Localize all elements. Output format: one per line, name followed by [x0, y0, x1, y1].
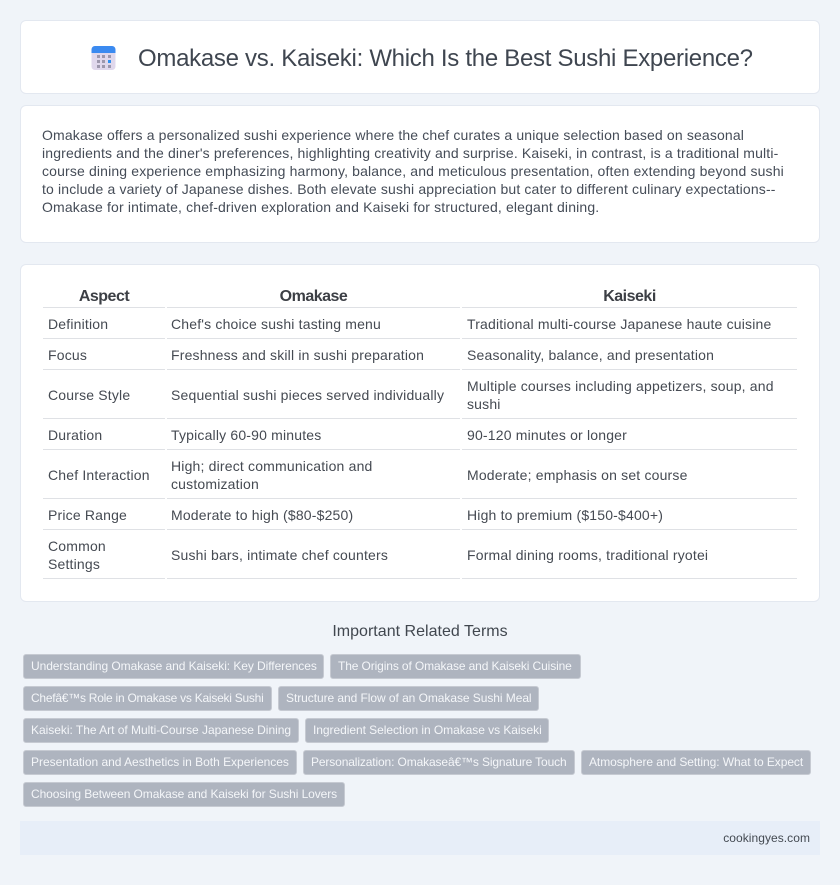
text: Moderate; emphasis on set course	[467, 467, 688, 483]
tag: Kaiseki: The Art of Multi-Course Japanese Dining	[31, 723, 291, 737]
text: sushi	[467, 396, 501, 412]
text: Typically 60-90 minutes	[171, 427, 321, 443]
row: price range: Price Range	[48, 507, 127, 523]
title: Omakase vs. Kaiseki: Which Is the Best Sushi Experience?	[138, 45, 753, 72]
tag: Personalization: Omakaseâ€™s Signature Touch	[311, 755, 567, 769]
footer bar	[20, 821, 820, 855]
text: Formal dining rooms, traditional ryotei	[467, 547, 708, 563]
panel: intro paragraph: course dining experience emphasizing harmony, balance, and meticulous presentation, often extending beyond sushi	[42, 163, 784, 179]
panel: intro paragraph: Omakase offers a personalized sushi experience where the chef curates a unique selection based on seasonal	[42, 127, 744, 143]
text: 90-120 minutes or longer	[467, 427, 627, 443]
panel: comparison table	[20, 264, 820, 602]
table header: omakase: Omakase	[280, 288, 347, 305]
tag: Ingredient Selection in Omakase vs Kaiseki	[313, 723, 542, 737]
panel: intro paragraph: Omakase for intimate, chef-driven exploration and Kaiseki for structured, elegant dining.	[42, 199, 599, 215]
panel: intro paragraph: ingredients and the diner's preferences, highlighting creativity and surprise. Kaiseki, in contrast, is a traditional multi-	[42, 145, 778, 161]
tag	[305, 718, 549, 743]
tag: Choosing Between Omakase and Kaiseki for Sushi Lovers	[31, 787, 337, 801]
text: Sushi bars, intimate chef counters	[171, 547, 388, 563]
tag: Chefâ€™s Role in Omakase vs Kaiseki Sushi	[31, 691, 264, 705]
tag: The Origins of Omakase and Kaiseki Cuisine	[338, 659, 572, 673]
footer text: cookingyes.com	[723, 831, 810, 845]
tag: Presentation and Aesthetics in Both Experiences	[31, 755, 289, 769]
text: Sequential sushi pieces served individually	[171, 387, 444, 403]
tag	[23, 686, 272, 711]
text: customization	[171, 476, 259, 492]
tag	[23, 718, 299, 743]
text: High to premium ($150-$400+)	[467, 507, 663, 523]
tag	[23, 782, 345, 807]
panel: intro paragraph: to include a variety of Japanese dishes. Both elevate sushi appreciation but cater to different culinary expectations--	[42, 181, 776, 197]
text: Chef's choice sushi tasting menu	[171, 316, 381, 332]
row: course style: Course Style	[48, 387, 130, 403]
panel: intro paragraph	[20, 105, 820, 243]
text: Seasonality, balance, and presentation	[467, 347, 714, 363]
text: Multiple courses including appetizers, soup, and	[467, 378, 774, 394]
tag: Structure and Flow of an Omakase Sushi Meal	[286, 691, 532, 705]
row: common settings: Common	[48, 538, 106, 554]
row: chef interaction: Chef Interaction	[48, 467, 150, 483]
tag	[303, 750, 575, 775]
tag	[581, 750, 811, 775]
table header: aspect: Aspect	[79, 288, 129, 305]
tag	[23, 750, 297, 775]
table header: kaiseki: Kaiseki	[603, 288, 656, 305]
header panel	[20, 20, 820, 94]
tag	[23, 654, 324, 679]
text: Moderate to high ($80-$250)	[171, 507, 353, 523]
text: High; direct communication and	[171, 458, 372, 474]
icon: calendar	[92, 46, 116, 70]
text: Freshness and skill in sushi preparation	[171, 347, 424, 363]
tag: Understanding Omakase and Kaiseki: Key Differences	[31, 659, 317, 673]
tag	[278, 686, 539, 711]
row: focus: Focus	[48, 347, 87, 363]
tag: Atmosphere and Setting: What to Expect	[589, 755, 803, 769]
tag	[330, 654, 581, 679]
text: Traditional multi-course Japanese haute cuisine	[467, 316, 771, 332]
heading: related terms: Important Related Terms	[332, 623, 508, 640]
text: Settings	[48, 556, 100, 572]
row: duration: Duration	[48, 427, 102, 443]
row: definition: Definition	[48, 316, 108, 332]
